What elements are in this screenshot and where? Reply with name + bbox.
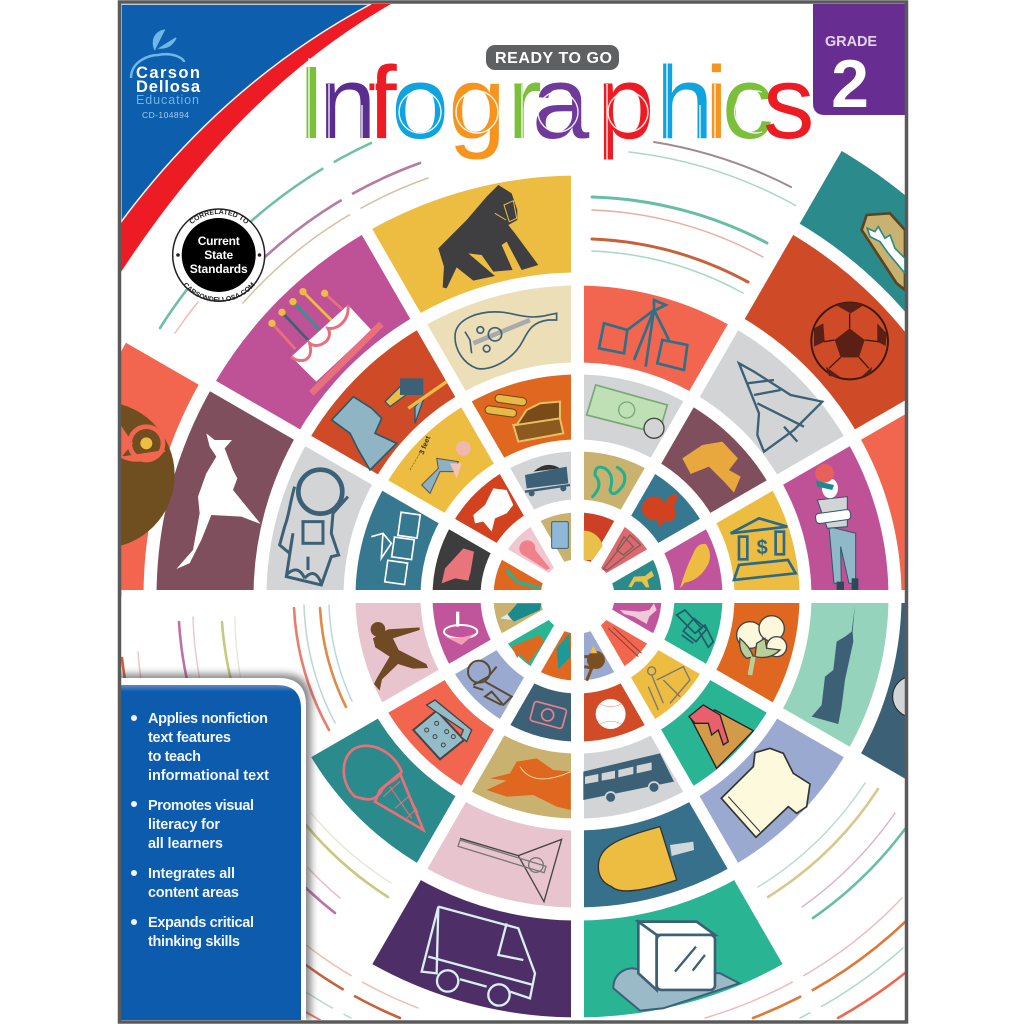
standards badge: CARSONDELLOSA.COM bbox=[184, 282, 255, 302]
ring 4 sectors bbox=[266, 249, 925, 944]
features panel bbox=[115, 674, 311, 1020]
title: Infographics: s bbox=[763, 45, 814, 160]
infographic wheel: coloured ring sectors bbox=[121, 6, 905, 1018]
standards badge: Standards bbox=[190, 262, 248, 276]
icon: ice cream cone bbox=[344, 746, 423, 830]
bullet list: Applies nonfiction bbox=[148, 711, 268, 727]
title: Infographics: p bbox=[597, 45, 654, 160]
icon: canary bbox=[680, 544, 710, 588]
title: Infographics: f bbox=[368, 45, 397, 160]
icon: ruler person bbox=[410, 434, 471, 493]
icon: hair dryer bbox=[519, 540, 550, 570]
publisher logo: Carson bbox=[136, 64, 200, 82]
icon: bottle bbox=[530, 701, 567, 729]
title: Infographics: g bbox=[448, 45, 506, 160]
title pill: Ready to Go bbox=[486, 45, 619, 70]
bullet list: content areas bbox=[148, 885, 239, 901]
icon: bus bbox=[583, 753, 674, 803]
ring 5 sectors bbox=[156, 127, 1024, 1024]
bullet list: Integrates all bbox=[148, 866, 235, 882]
icon: horse bbox=[628, 571, 654, 587]
icon: treasure chest and logs bbox=[485, 394, 563, 442]
icon: marker bbox=[500, 603, 541, 622]
title: Infographics: I bbox=[297, 45, 326, 160]
icon: owl bbox=[121, 404, 175, 546]
icon: clock bbox=[893, 676, 934, 717]
title: Infographics: c bbox=[722, 45, 774, 160]
icon: delivery truck bbox=[422, 907, 535, 1006]
icon: teddy bear bbox=[468, 661, 512, 705]
title: Infographics: r bbox=[508, 45, 542, 160]
ring 1 sectors bbox=[494, 512, 662, 680]
icon: eagle bbox=[487, 758, 571, 810]
publisher logo: CD-104894 bbox=[142, 110, 189, 120]
bullet list: informational text bbox=[148, 768, 269, 784]
icon: volcano bbox=[689, 705, 753, 768]
icon: gold coin bbox=[584, 531, 603, 560]
icon: baseball batter bbox=[371, 622, 428, 691]
title pill: Ready to Go: READY TO GO bbox=[495, 50, 612, 67]
icon: girl with helmet bbox=[815, 464, 858, 590]
publisher logo bbox=[131, 30, 201, 120]
grade tab bbox=[813, 4, 905, 122]
icon: orange animal bbox=[512, 635, 544, 663]
icon: popsicle bbox=[598, 827, 694, 891]
icon: baseball bbox=[596, 699, 626, 729]
icon: coal cart bbox=[525, 465, 570, 496]
bullet list bbox=[131, 711, 269, 950]
grade tab: GRADE bbox=[825, 34, 877, 50]
icon: oud instrument bbox=[455, 312, 557, 369]
icon: capitol building bbox=[599, 300, 687, 370]
ring 3 sectors bbox=[356, 374, 800, 818]
standards badge: Current bbox=[198, 234, 240, 248]
icon: ant bbox=[584, 645, 605, 681]
standards badge: CORRELATED TO bbox=[190, 210, 248, 224]
bullet list: thinking skills bbox=[148, 934, 240, 950]
grade tab: 2 bbox=[831, 46, 869, 122]
decorative arcs around the wheel bbox=[122, 142, 905, 1020]
icon: balalaika bbox=[458, 838, 562, 902]
icon: bank: $ bbox=[757, 537, 768, 559]
icon: dollar bill with coin bbox=[587, 385, 667, 438]
icon: turkey bbox=[642, 494, 678, 528]
standards badge bbox=[172, 208, 266, 302]
icon: sheep bbox=[473, 488, 513, 532]
publisher logo: Dellosa bbox=[136, 78, 201, 96]
bullet list: Promotes visual bbox=[148, 798, 254, 814]
icon: dinosaur skull bbox=[862, 213, 905, 290]
icon: spinning top bbox=[444, 612, 477, 645]
title: Infographics: a bbox=[532, 45, 590, 160]
icon: apartment building bbox=[371, 512, 420, 585]
title: Infographics: o bbox=[392, 45, 449, 160]
title: Infographics: i bbox=[705, 45, 728, 160]
icon: clothes iron bbox=[603, 535, 641, 570]
icon: birthday cake bbox=[268, 288, 381, 393]
ring 2 sectors bbox=[432, 452, 722, 742]
icon: deer bbox=[620, 603, 657, 624]
icon: soccer ball bbox=[811, 302, 888, 379]
icon: cream shirt bbox=[721, 748, 810, 837]
publisher logo: Education bbox=[136, 93, 199, 107]
icon: skeleton sketch bbox=[648, 667, 690, 710]
icon: satellite bbox=[677, 610, 713, 647]
title: Infographics: n bbox=[319, 45, 376, 160]
icon: statue with torch bbox=[332, 378, 447, 470]
icon: pencil bbox=[608, 627, 642, 657]
bullet list: all learners bbox=[148, 836, 223, 852]
bullet list: Expands critical bbox=[148, 915, 254, 931]
blue corner with red swoosh bbox=[121, 4, 391, 272]
icon: telephone bbox=[413, 700, 472, 759]
icon: kangaroo bbox=[176, 433, 261, 569]
icon: United States map bbox=[442, 548, 474, 583]
icon: astronaut bbox=[280, 470, 348, 585]
bullet list: to teach bbox=[148, 749, 201, 765]
title: Infographics: h bbox=[656, 45, 713, 160]
icon: cotton plant bbox=[737, 616, 787, 675]
icon: space shuttle bbox=[739, 363, 822, 452]
ring 6 sectors bbox=[60, 148, 1024, 596]
icon: bank bbox=[731, 518, 796, 580]
bullet list: literacy for bbox=[148, 817, 220, 833]
icon: Empire State Building bbox=[812, 605, 855, 724]
icon: snake bbox=[593, 467, 625, 497]
standards badge: State bbox=[204, 248, 234, 262]
icon: phone tablet bbox=[552, 522, 568, 548]
icon: gorilla bbox=[438, 185, 538, 288]
icon: ruler person: 3 feet bbox=[417, 434, 433, 456]
icon: praying mantis bbox=[507, 570, 540, 588]
icon: ice cube bbox=[613, 922, 739, 1011]
icon: crystal bbox=[557, 633, 571, 669]
bullet list: text features bbox=[148, 730, 231, 746]
icon: Africa map bbox=[682, 442, 741, 493]
